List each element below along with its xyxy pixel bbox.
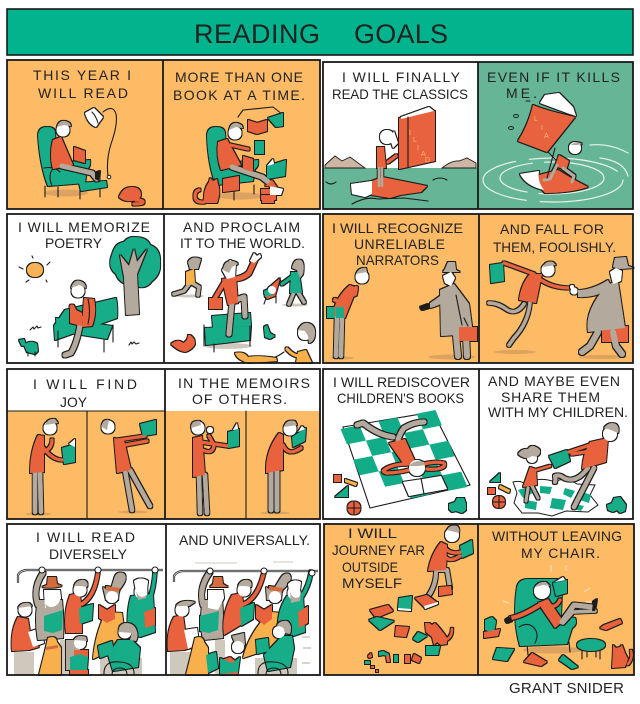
caption	[487, 69, 620, 101]
caption: AND PROCLAIM	[183, 219, 300, 235]
icon: ripples	[483, 145, 628, 202]
icon: mountains	[325, 156, 476, 168]
caption	[332, 69, 468, 102]
caption: ME.	[506, 85, 537, 101]
caption: WITH MY CHILDREN.	[488, 404, 628, 420]
icon: man leaping after the narrator	[489, 262, 570, 354]
icon: man stepping on books	[415, 526, 473, 609]
icon: person on a book raft with the Iliad: I	[417, 145, 419, 152]
caption	[33, 67, 131, 101]
panel: I will rediscover children's books	[323, 369, 479, 519]
icon: toys	[334, 475, 466, 514]
icon: person on a book raft with the Iliad	[326, 107, 447, 204]
icon: turtle	[19, 326, 139, 356]
caption: I WILL READ	[36, 529, 135, 545]
icon: reader in armchair with lamp	[38, 108, 143, 204]
icon: crumpled blanket	[513, 479, 598, 516]
icon: narrator walking off with briefcase	[570, 257, 634, 359]
panel: even if it kills me	[478, 62, 633, 209]
icon: dog on a leash and woman	[235, 323, 315, 363]
icon: man approaching	[327, 268, 368, 360]
icon: cat on the books	[425, 623, 452, 645]
caption: AND MAYBE EVEN	[488, 373, 620, 389]
caption: DIVERSELY	[49, 546, 128, 562]
caption	[493, 221, 616, 255]
caption: WILL READ	[38, 85, 128, 101]
caption	[180, 219, 305, 251]
icon: reader flung back in armchair	[503, 565, 597, 655]
panel: and fall for them, foolishly	[479, 214, 634, 363]
icon: checkered blanket	[340, 410, 470, 508]
title banner: READING	[194, 19, 320, 49]
icon: person on a book raft with the Iliad: I	[409, 130, 411, 137]
caption	[492, 528, 622, 561]
icon: man wiping eye, book held out	[191, 421, 239, 513]
icon: man leaning back with book	[102, 420, 156, 514]
panel: I will finally read the classics	[323, 62, 478, 209]
icon: bird	[264, 325, 275, 339]
icon: subway rail	[170, 562, 318, 675]
caption: I WILL	[348, 525, 397, 541]
caption: NARRATORS	[356, 252, 439, 268]
caption: WITHOUT LEAVING	[492, 528, 622, 544]
caption: EVEN IF IT KILLS	[487, 69, 620, 85]
caption: JOURNEY FAR	[332, 542, 425, 558]
caption	[332, 220, 463, 268]
panel: I will read diversely	[7, 524, 166, 675]
icon: person sinking holding the Iliad	[508, 93, 588, 193]
icon: sun	[19, 256, 50, 282]
caption	[333, 374, 470, 406]
icon: squirrel	[171, 335, 195, 352]
caption: SHARE THEM	[501, 389, 600, 405]
panel: without leaving my chair	[478, 524, 634, 675]
caption	[173, 69, 305, 103]
panel: I will find joy	[7, 369, 320, 519]
icon: person on a book raft with the Iliad: L	[413, 137, 417, 144]
icon: tree	[110, 237, 160, 315]
panel: and maybe even share them with my children	[479, 369, 633, 519]
icon: reader on a park bench	[54, 281, 117, 355]
caption: IT TO THE WORLD.	[180, 235, 305, 251]
panel: I will memorize poetry	[7, 214, 164, 363]
panel: I will recognize unreliable narrators	[323, 214, 479, 363]
icon: man with face pressed into book	[260, 421, 306, 514]
caption	[18, 219, 150, 251]
caption	[178, 375, 310, 407]
caption: OF OTHERS.	[192, 391, 287, 407]
caption: CHILDREN'S BOOKS	[337, 390, 464, 406]
icon: scattered books and cat	[484, 617, 632, 669]
caption: I WILL MEMORIZE	[18, 219, 150, 235]
title banner	[7, 9, 633, 55]
caption: OUTSIDE	[342, 559, 398, 575]
panel: and proclaim it to the world	[164, 214, 320, 363]
caption: BOOK AT A TIME.	[173, 87, 305, 103]
caption: READ THE CLASSICS	[332, 86, 468, 102]
icon: man reading, surprised	[25, 419, 75, 516]
icon: trail of books	[365, 596, 440, 672]
icon: person sinking holding the Iliad: L	[534, 116, 538, 123]
icon: narrator in trench coat	[420, 262, 477, 360]
caption: I WILL FIND	[33, 376, 137, 392]
caption: THEM, FOOLISHLY.	[493, 239, 616, 255]
panel: this year I will read	[7, 60, 163, 209]
title banner: GOALS	[354, 19, 448, 49]
caption	[332, 525, 425, 591]
caption: MORE THAN ONE	[175, 69, 303, 85]
caption: MY CHAIR.	[521, 545, 600, 561]
caption: AND FALL FOR	[500, 221, 604, 237]
caption: AND UNIVERSALLY.	[179, 532, 310, 548]
caption: IN THE MEMOIRS	[178, 375, 310, 391]
icon: person on a book raft with the Iliad: A	[421, 151, 426, 158]
panel: in the memoirs of others	[165, 369, 320, 519]
icon: person sinking holding the Iliad: A	[544, 133, 549, 140]
credit: artist signature: GRANT SNIDER	[509, 680, 624, 697]
icon: woman pushing stroller	[264, 260, 308, 306]
caption: POETRY	[45, 235, 103, 251]
caption: JOY	[60, 394, 88, 410]
panel: and universally	[166, 524, 320, 675]
caption: I WILL FINALLY	[342, 69, 461, 85]
caption	[33, 376, 137, 410]
icon: person sinking holding the Iliad: I	[541, 125, 543, 132]
icon: footstool	[577, 639, 605, 659]
icon: runner	[174, 258, 204, 298]
caption: UNRELIABLE	[354, 236, 445, 252]
icon: toys	[488, 473, 626, 513]
icon: subway rail	[14, 570, 163, 675]
panel: I will journey far outside myself	[324, 524, 478, 675]
caption: I WILL RECOGNIZE	[332, 220, 463, 236]
caption	[488, 373, 628, 420]
icon: subway passengers reading, mixed up	[168, 568, 315, 675]
icon: subway passengers reading	[12, 567, 158, 675]
icon: parent tugging the book with child	[518, 423, 619, 507]
panel: more than one book at a time	[163, 60, 320, 209]
icon: person on a book raft with the Iliad: D	[425, 157, 430, 164]
caption: I WILL REDISCOVER	[333, 374, 470, 390]
icon: man lying on blanket reading	[357, 422, 447, 496]
caption	[36, 529, 135, 562]
caption: THIS YEAR I	[33, 67, 131, 83]
icon: man on bench proclaiming	[204, 253, 261, 352]
caption: MYSELF	[342, 575, 402, 591]
icon: reader surrounded by books, mug and cat	[195, 107, 286, 203]
